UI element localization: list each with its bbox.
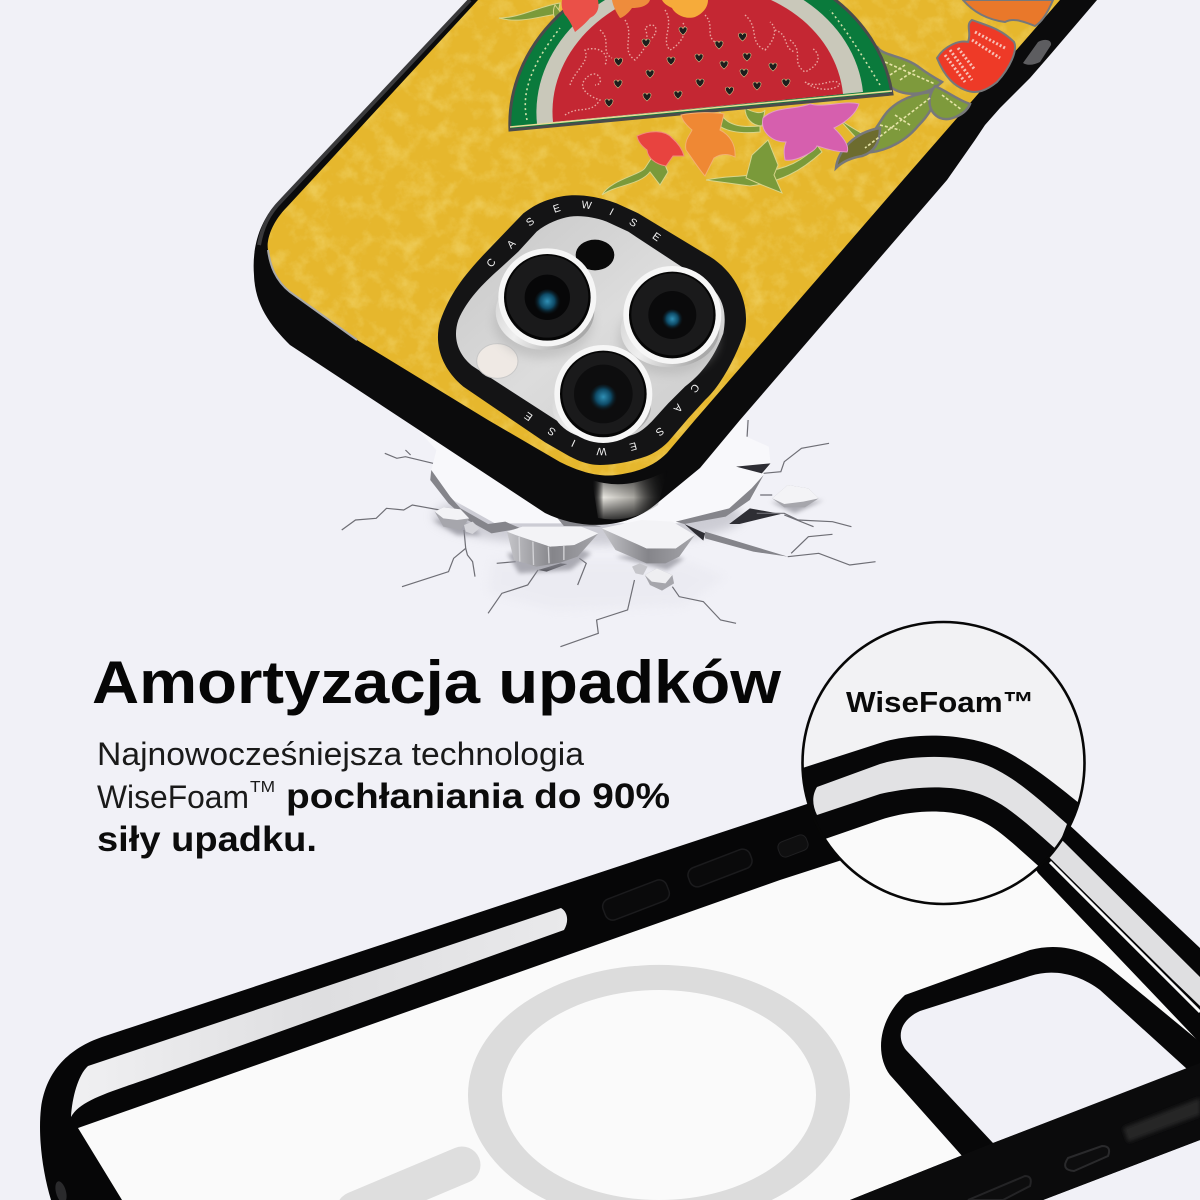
- description text: [97, 736, 670, 859]
- side button notch: [1023, 40, 1051, 65]
- brand lettering on ring: S: [546, 424, 558, 438]
- flowers: [562, 0, 1053, 176]
- flesh vines: [565, 10, 840, 115]
- description text: WiseFoam: [97, 779, 249, 815]
- microphone hole: [576, 240, 614, 270]
- phone case black frame: [254, 0, 1097, 525]
- flesh: [552, 0, 843, 122]
- brand lettering on ring: I: [607, 206, 615, 218]
- brand lettering on ring: S: [653, 424, 666, 438]
- plate broken edges: [430, 470, 788, 557]
- big leaves: [836, 48, 970, 168]
- rind pattern: [525, 10, 880, 120]
- action button: [1065, 1146, 1109, 1171]
- rind: [510, 0, 892, 130]
- brand lettering on ring: S: [524, 215, 537, 229]
- magnet bar: [355, 1165, 462, 1200]
- brand lettering on ring: W: [581, 199, 593, 212]
- side gap left: [71, 908, 567, 1117]
- lower soft shading: [488, 560, 726, 610]
- camera module: [438, 195, 746, 465]
- gap white line: [1050, 862, 1200, 1012]
- rock shadows: [433, 500, 824, 573]
- leaf veins: [865, 62, 962, 148]
- MagSafe ring: [468, 965, 850, 1200]
- brand lettering on ring: C: [484, 256, 499, 270]
- bottom band bumper: [850, 1063, 1200, 1200]
- impact shadow: [433, 488, 743, 545]
- brand lettering on ring: C: [687, 381, 702, 395]
- magnifier border: [802, 622, 1084, 904]
- panel texture: [240, 0, 1080, 490]
- magnifier fill: [802, 622, 1084, 904]
- batik pattern: [499, 0, 1053, 195]
- magnified interior: [826, 812, 1038, 900]
- raised ground plates: [409, 420, 770, 523]
- camera ring: [438, 195, 746, 465]
- large rock right: [602, 520, 695, 563]
- top orange flower: [612, 0, 650, 18]
- power button: [968, 1176, 1031, 1200]
- top yellow flower: [662, 0, 708, 18]
- yellow back panel: [240, 0, 1080, 490]
- camera cutout opening: [901, 973, 1187, 1143]
- flower stitching: [945, 32, 1005, 82]
- cracked ground illustration: [342, 420, 876, 647]
- brand lettering on ring: E: [522, 409, 535, 423]
- volume buttons: [600, 847, 754, 922]
- dark crevices: [538, 463, 781, 572]
- side gap right: [990, 780, 1200, 1006]
- brand lettering on ring: [484, 199, 702, 457]
- small red flower: [637, 132, 684, 166]
- crack lines: [342, 420, 876, 647]
- magnified foam strip: [813, 757, 1067, 850]
- lens right: [618, 266, 721, 375]
- lens bottom: [552, 345, 652, 443]
- large red flower: [937, 20, 1015, 92]
- top left red flower: [562, 0, 599, 32]
- top phone in case: [240, 0, 1097, 525]
- brand lettering on ring: E: [552, 202, 562, 216]
- lens top left: [493, 248, 596, 358]
- description text: siły upadku.: [97, 820, 317, 859]
- large rock left: [507, 527, 598, 567]
- title: Amortyzacja upadków: [92, 649, 781, 716]
- side switch: [776, 833, 810, 859]
- brand lettering on ring: E: [628, 439, 638, 453]
- magnified corner: [804, 736, 1078, 866]
- brand lettering on ring: E: [650, 230, 663, 244]
- bottom corner shine: [594, 476, 660, 520]
- orange flower: [681, 113, 735, 176]
- description text: Najnowocześniejsza technologia: [97, 736, 584, 772]
- panel edge highlight: [268, 250, 357, 340]
- brand lettering on ring: A: [670, 401, 685, 415]
- camera cutout frame: [881, 947, 1200, 1157]
- seeds: [605, 27, 790, 107]
- watermelon slice: [510, 0, 892, 130]
- brand lettering on ring: A: [505, 237, 519, 251]
- pink flower: [763, 103, 859, 160]
- flash: [477, 344, 518, 378]
- small rocks: [435, 485, 819, 591]
- description text: TM: [250, 779, 275, 796]
- outer black bumper: [40, 756, 1200, 1200]
- top right orange flower: [963, 0, 1053, 26]
- bumper sheen: [1123, 1098, 1200, 1142]
- brand lettering on ring: I: [570, 437, 577, 449]
- brand lettering on ring: W: [595, 445, 607, 457]
- brand lettering on ring: S: [627, 216, 639, 230]
- magnifier label: WiseFoam™: [846, 687, 1034, 719]
- bottom phone case (clear back): [40, 756, 1200, 1200]
- description text: pochłaniania do 90%: [286, 777, 670, 816]
- magnifier callout: [790, 622, 1090, 920]
- white rind band: [536, 0, 863, 124]
- chord border: [510, 91, 892, 127]
- frame highlight: [259, 0, 470, 245]
- speaker hole: [53, 1180, 69, 1200]
- camera window: [456, 216, 725, 440]
- stems and small leaves: [499, 3, 875, 195]
- clear interior: [78, 820, 1200, 1200]
